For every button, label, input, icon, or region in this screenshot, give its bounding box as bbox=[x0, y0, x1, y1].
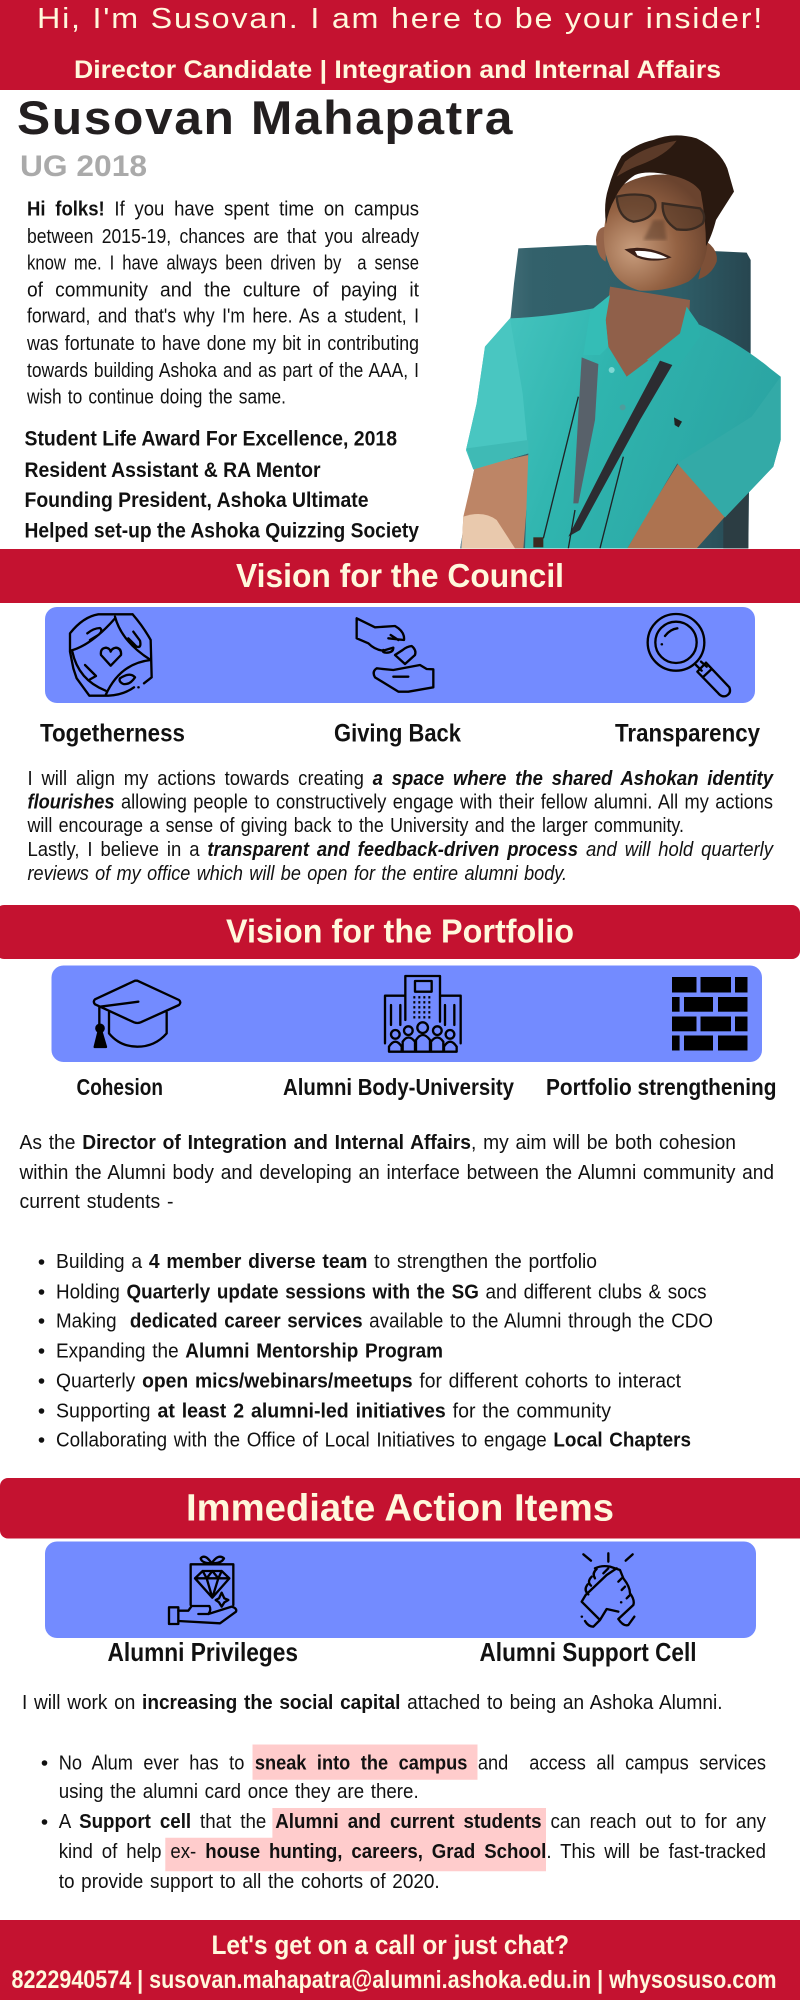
council text block: reviews of my office which will be open for the entire alumni body. bbox=[28, 863, 567, 885]
class year: UG 2018 bbox=[20, 150, 147, 183]
lanyard bbox=[568, 361, 672, 537]
highlighted bullet list: kind of help ex- house hunting, careers, Grad School. This will be fast-tracked bbox=[59, 1841, 766, 1863]
portfolio bullet list: Expanding the Alumni Mentorship Program bbox=[56, 1340, 443, 1362]
council text block: I will align my actions towards creating a space where the shared Ashokan identity bbox=[28, 768, 774, 790]
council labels: Togetherness bbox=[40, 720, 185, 748]
section bar: immediate action items bbox=[0, 1478, 800, 1538]
footer contact band bbox=[0, 1920, 800, 2000]
portfolio text block: within the Alumni body and developing an interface between the Alumni community and bbox=[19, 1162, 774, 1184]
portrait photo illustration bbox=[460, 135, 781, 548]
intro paragraph: know me. I have always been driven by a sense bbox=[27, 252, 419, 274]
header banner bbox=[0, 0, 800, 90]
intro paragraph bbox=[26, 198, 419, 408]
achievements list: Student Life Award For Excellence, 2018 bbox=[24, 428, 397, 450]
portfolio bullet list: Quarterly open mics/webinars/meetups for different cohorts to interact bbox=[56, 1370, 681, 1392]
council text block: Lastly, I believe in a transparent and feedback-driven process and will hold quarterly bbox=[28, 839, 774, 861]
highlighted bullet list bbox=[42, 1744, 766, 1893]
highlighted bullet list: A Support cell that the Alumni and current students can reach out to for any bbox=[59, 1811, 766, 1833]
council labels bbox=[40, 720, 760, 748]
council labels: Giving Back bbox=[334, 720, 461, 748]
council text block: will encourage a sense of giving back to the University and the larger community. bbox=[27, 815, 684, 837]
council labels: Transparency bbox=[615, 720, 760, 748]
footer call to action: Let's get on a call or just chat? bbox=[212, 1930, 569, 1960]
portfolio labels: Portfolio strengthening bbox=[546, 1074, 776, 1100]
candidate name: Susovan Mahapatra bbox=[17, 91, 514, 144]
portfolio bullet list: Holding Quarterly update sessions with the SG and different clubs & socs bbox=[56, 1282, 706, 1304]
intro paragraph: was fortunate to have done my bit in contributing bbox=[26, 333, 419, 355]
portfolio bullet list bbox=[39, 1251, 713, 1452]
intro paragraph: towards building Ashoka and as part of the AAA, I bbox=[27, 360, 419, 382]
achievements list: Helped set-up the Ashoka Quizzing Society bbox=[24, 520, 419, 542]
candidate role: Director Candidate | Integration and Internal Affairs bbox=[74, 56, 721, 84]
achievements list: Resident Assistant & RA Mentor bbox=[24, 459, 320, 482]
face bbox=[604, 175, 708, 291]
ears bbox=[596, 227, 607, 262]
action item labels: Alumni Support Cell bbox=[480, 1637, 696, 1667]
glasses bbox=[617, 194, 704, 230]
left forearm bbox=[462, 455, 528, 548]
icon: brick wall bbox=[672, 977, 748, 1050]
right forearm bbox=[627, 463, 725, 548]
council heading: Vision for the Council bbox=[236, 557, 564, 594]
smile bbox=[624, 248, 672, 261]
section bar: vision for the council bbox=[0, 549, 800, 603]
portfolio text block bbox=[19, 1132, 774, 1213]
icon: gift with diamond bbox=[169, 1557, 236, 1624]
achievements list: Founding President, Ashoka Ultimate bbox=[24, 489, 368, 512]
portfolio labels: Alumni Body-University bbox=[283, 1074, 514, 1100]
highlighted bullet list: No Alum ever has to sneak into the campus and access all campus services bbox=[59, 1752, 766, 1774]
icon: magnifying glass bbox=[648, 614, 730, 696]
banner greeting: Hi, I'm Susovan. I am here to be your insider! bbox=[37, 3, 764, 35]
section bar: vision for the portfolio bbox=[0, 905, 800, 959]
intro paragraph: wish to continue doing the same. bbox=[26, 386, 286, 408]
icon: giving heart bbox=[357, 618, 433, 692]
panel: portfolio icons bbox=[52, 966, 762, 1062]
shirt details bbox=[609, 367, 615, 373]
portfolio labels bbox=[76, 1074, 776, 1100]
portfolio text block: current students - bbox=[20, 1191, 174, 1213]
action item labels bbox=[108, 1637, 696, 1667]
highlighted bullet list: to provide support to all the cohorts of 2020. bbox=[59, 1871, 440, 1893]
portfolio heading: Vision for the Portfolio bbox=[226, 912, 574, 950]
portfolio bullet list: Supporting at least 2 alumni-led initiatives for the community bbox=[56, 1400, 611, 1422]
portfolio text block: As the Director of Integration and Internal Affairs, my aim will be both cohesion bbox=[20, 1132, 736, 1154]
action text intro: I will work on increasing the social capital attached to being an Ashoka Alumni. bbox=[22, 1692, 722, 1714]
neck bbox=[606, 287, 690, 377]
achievements list bbox=[24, 428, 419, 542]
council text block bbox=[27, 768, 774, 885]
icon: graduation cap bbox=[94, 981, 180, 1047]
icon: clasped hands bbox=[582, 1553, 634, 1627]
action items heading: Immediate Action Items bbox=[186, 1488, 614, 1530]
intro paragraph: Hi folks! If you have spent time on campus bbox=[27, 198, 419, 220]
polo shirt bbox=[466, 295, 781, 548]
intro paragraph: of community and the culture of paying it bbox=[27, 280, 419, 302]
portfolio bullet list: Building a 4 member diverse team to strengthen the portfolio bbox=[56, 1251, 597, 1273]
action item labels: Alumni Privileges bbox=[108, 1637, 298, 1667]
hair bbox=[605, 135, 734, 246]
icon: building with people bbox=[385, 976, 461, 1052]
portfolio bullet list: Making dedicated career services available to the Alumni through the CDO bbox=[56, 1310, 713, 1332]
panel: action item icons bbox=[45, 1542, 756, 1638]
portfolio labels: Cohesion bbox=[76, 1074, 163, 1100]
portfolio bullet list: Collaborating with the Office of Local Initiatives to engage Local Chapters bbox=[56, 1430, 691, 1452]
intro paragraph: between 2015-19, chances are that you already bbox=[27, 226, 419, 248]
panel: council icons bbox=[45, 607, 755, 703]
icon: hands around heart bbox=[70, 614, 152, 696]
intro paragraph: forward, and that's why I'm here. As a student, I bbox=[27, 306, 419, 328]
highlighted bullet list: using the alumni card once they are there. bbox=[59, 1781, 419, 1803]
